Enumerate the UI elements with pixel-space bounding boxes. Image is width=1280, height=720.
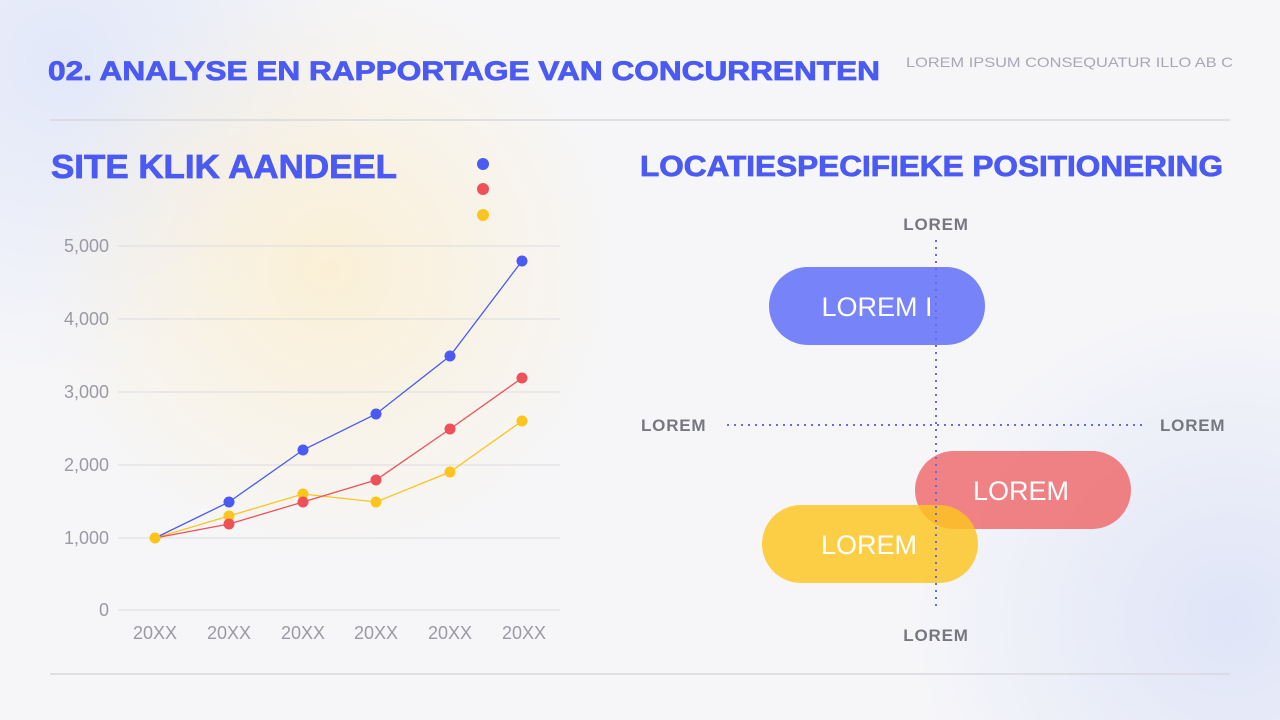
line chart: 20XX [502, 623, 546, 643]
pill: blue: LOREM I [821, 292, 933, 322]
pill: yellow: LOREM [821, 530, 917, 560]
line chart: 20XX [133, 623, 177, 643]
pill: red: LOREM [973, 476, 1069, 506]
heading: locatiespecifieke positionering: LOCATIESPECIFIEKE POSITIONERING [640, 151, 1223, 183]
line chart: 20XX [354, 623, 398, 643]
pill: blue [769, 267, 985, 345]
line chart: 20XX [281, 623, 325, 643]
title: 02. ANALYSE EN RAPPORTAGE VAN CONCURRENTEN [48, 56, 880, 86]
pill: red [915, 451, 1131, 529]
positioning map: LOREM [641, 416, 706, 435]
positioning map: LOREM [903, 215, 969, 234]
positioning map: LOREM [903, 626, 969, 645]
positioning map [641, 215, 1225, 645]
line chart: 0 [99, 600, 109, 620]
line chart: 5,000 [64, 236, 109, 256]
line chart: 4,000 [64, 309, 109, 329]
line chart: 2,000 [64, 455, 109, 475]
legend [477, 158, 489, 221]
positioning map: LOREM [1160, 416, 1225, 435]
line chart: 1,000 [64, 528, 109, 548]
heading: site klik aandeel: SITE KLIK AANDEEL [51, 148, 397, 185]
subtitle: LOREM IPSUM CONSEQUATUR ILLO AB C [906, 54, 1233, 70]
line chart: 3,000 [64, 382, 109, 402]
line chart: 20XX [207, 623, 251, 643]
pill: yellow [762, 505, 978, 583]
line chart: 20XX [428, 623, 472, 643]
line chart [64, 236, 560, 643]
